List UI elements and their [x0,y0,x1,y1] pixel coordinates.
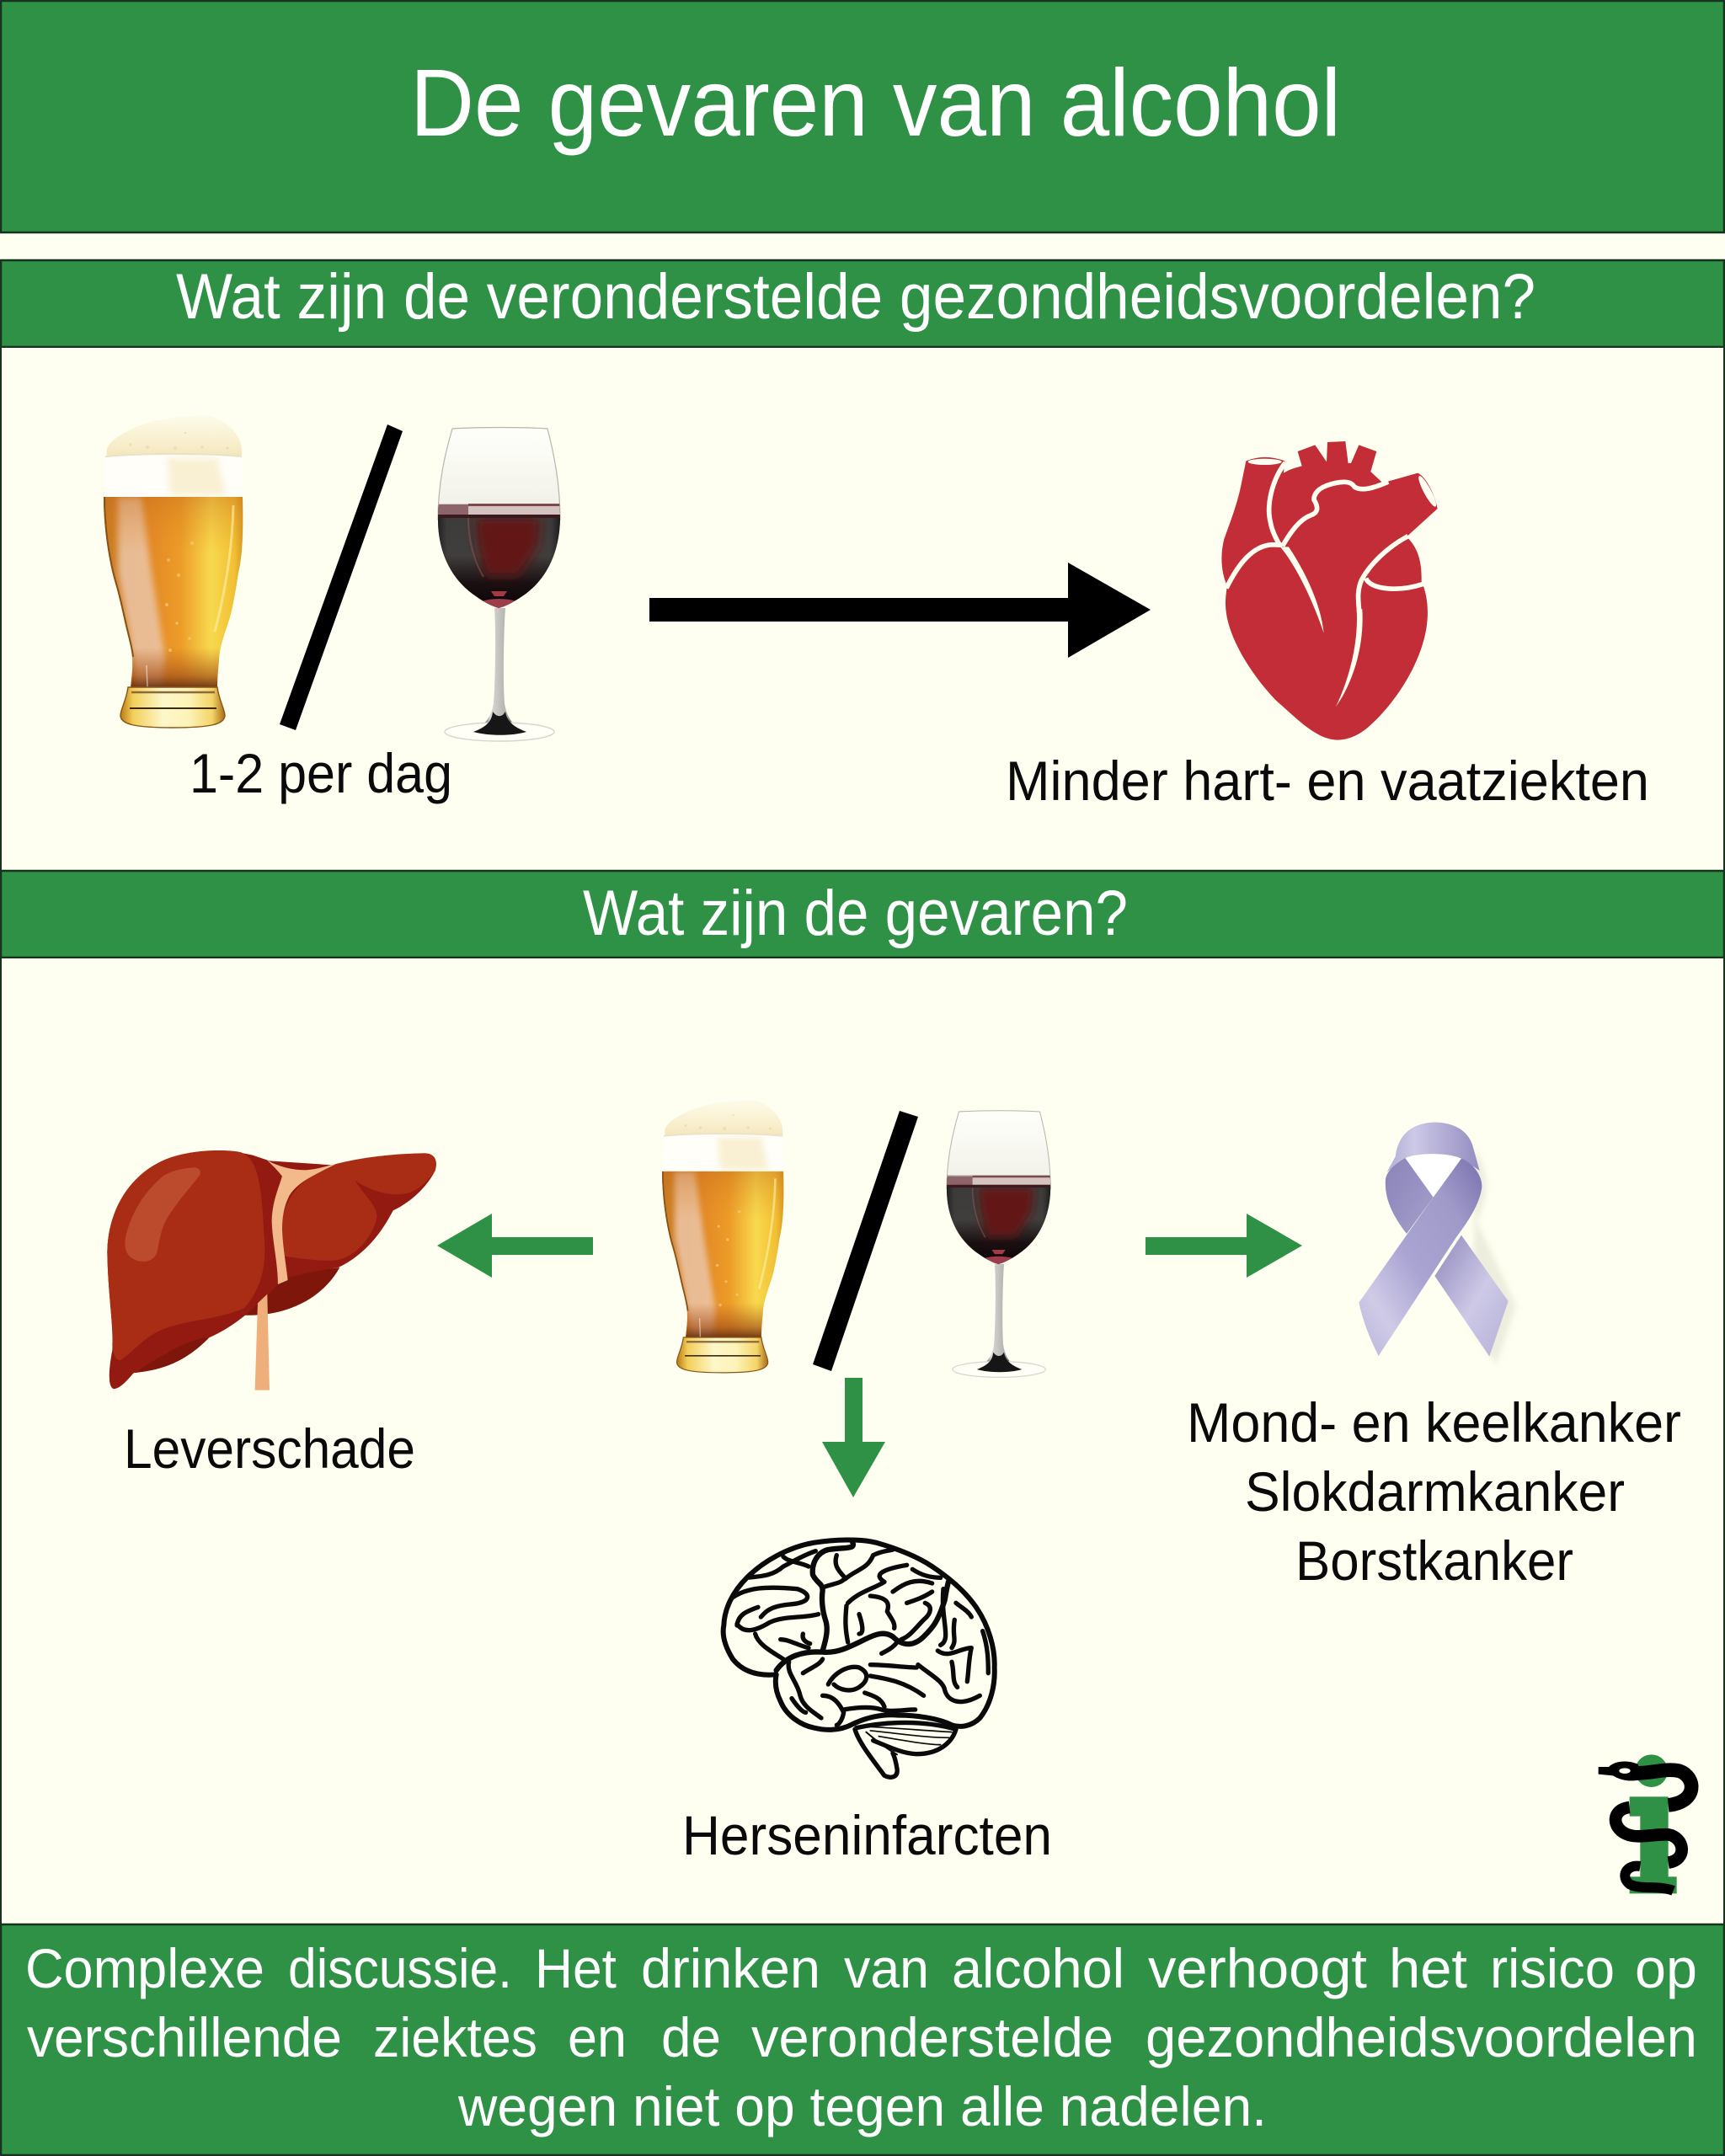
summary line 2: gezondheidsvoordelen [1146,2006,1697,2068]
icon: beer glass [101,416,246,728]
heading bar: benefits [1,260,1724,347]
summary line 1: verhoogt [1148,1937,1367,1999]
icon: wine glass [435,428,563,741]
summary line 2: verschillende [27,2006,342,2068]
summary line 3: wegen niet op tegen alle nadelen. [457,2075,1267,2137]
label: cancers: Borstkanker [1295,1529,1573,1592]
summary line 2: en [568,2006,627,2068]
summary line 2: de [661,2006,721,2068]
icon: logo [1599,1754,1691,1893]
label: heart: Minder hart- en vaatziekten [1006,750,1649,812]
title: De gevaren van alcohol [410,50,1341,156]
panel: dangers [1,958,1724,1924]
icon: brain [724,1540,995,1777]
heading: dangers: Wat zijn de gevaren? [583,878,1128,949]
label: liver: Leverschade [124,1417,415,1480]
heading: benefits: Wat zijn de veronderstelde gezondheidsvoordelen? [176,261,1535,333]
label: cancers [1187,1391,1681,1592]
label: cancers: Slokdarmkanker [1245,1460,1625,1523]
icon: slash small [813,1111,918,1371]
summary line 2: veronderstelde [751,2006,1114,2068]
arrow: to brain [822,1378,885,1497]
arrow: to ribbon [1146,1214,1302,1278]
heading bar: dangers [1,871,1724,958]
arrow: black [649,563,1151,658]
icon: ribbon [1359,1123,1516,1364]
icon: beer glass small [660,1101,787,1373]
label: dose: 1-2 per dag [190,742,452,804]
summary line 1: Complexe [25,1937,264,1999]
title bar [1,1,1724,232]
summary line 1: alcohol [952,1937,1124,1999]
summary line 1: discussie. [288,1937,512,1999]
bottom summary bar [1,1924,1724,2155]
icon: wine glass small [944,1111,1053,1377]
icon: slash [280,424,403,730]
summary line 1: op [1635,1937,1697,1999]
arrow: to liver [437,1214,593,1278]
summary line 1: drinken [641,1937,820,1999]
summary line 2: ziektes [373,2006,537,2068]
label: cancers: Mond- en keelkanker [1187,1391,1681,1454]
summary line 1: Het [535,1937,617,1999]
summary line 1: van [844,1937,929,1999]
summary line 1: risico [1490,1937,1615,1999]
summary line 1: het [1389,1937,1467,1999]
panel: benefits [1,347,1724,871]
icon: heart [1221,441,1439,740]
label: brain: Herseninfarcten [682,1804,1052,1866]
icon: liver [107,1150,436,1390]
